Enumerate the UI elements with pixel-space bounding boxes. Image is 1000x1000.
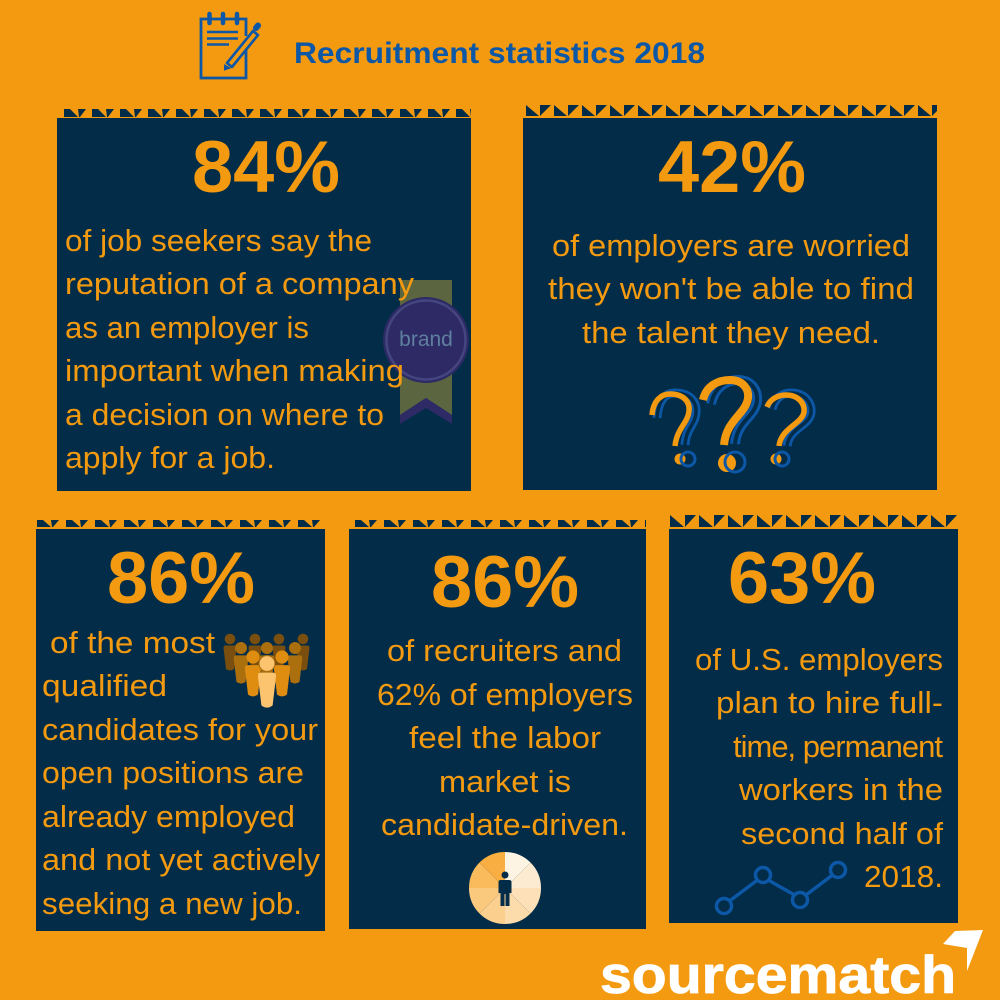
header icon: notepad and pencil: [201, 14, 258, 78]
body text: job seekers: reputation of a company: [65, 266, 415, 301]
body text: job seekers: as an employer is: [65, 310, 309, 345]
body text: qualified candidates: and not yet actively: [42, 842, 321, 877]
body text: recruiters: 62% of employers: [377, 677, 633, 712]
icon: group of people: [224, 634, 310, 708]
body text: worried employers: [548, 228, 914, 350]
icon: line chart: [716, 862, 846, 914]
logo: sourcematch: [600, 930, 983, 1000]
statistic: 84%: 84%: [192, 127, 340, 208]
body text: U.S. employers: [695, 642, 943, 894]
body text: qualified candidates: of the most: [50, 625, 215, 660]
statistic: 42%: 42%: [658, 127, 806, 208]
body text: qualified candidates: [42, 625, 321, 921]
body text: job seekers: [65, 223, 415, 475]
body text: job seekers: important when making: [65, 353, 404, 388]
body text: U.S. employers: workers in the: [738, 772, 943, 807]
body text: qualified candidates: open positions are: [42, 755, 304, 790]
icon: question marks: [652, 380, 811, 472]
body text: U.S. employers: plan to hire full-: [716, 685, 943, 720]
body text: recruiters: feel the labor: [409, 720, 601, 755]
body text: qualified candidates: already employed: [42, 799, 295, 834]
body text: U.S. employers: of U.S. employers: [695, 642, 943, 677]
body text: qualified candidates: qualified: [42, 668, 167, 703]
body text: qualified candidates: candidates for your: [42, 712, 318, 747]
body text: worried employers: of employers are worried: [552, 228, 910, 263]
body text: worried employers: they won't be able to find: [548, 271, 914, 306]
body text: recruiters: [377, 633, 633, 842]
body text: job seekers: of job seekers say the: [65, 223, 372, 258]
statistic: 86%: 86%: [107, 538, 255, 619]
icon: brand ribbon badge: brand: [399, 328, 453, 351]
panel: 63% U.S. employers: [669, 515, 958, 923]
body text: recruiters: candidate-driven.: [381, 807, 628, 842]
icon: logo arrow: [943, 930, 983, 971]
panel: 84% job seekers: [57, 109, 471, 491]
statistic: 86%: 86%: [431, 542, 579, 623]
body text: job seekers: a decision on where to: [65, 397, 384, 432]
body text: U.S. employers: time, permanent: [733, 729, 943, 764]
panel: 42% employers: [523, 105, 937, 490]
body text: recruiters: market is: [439, 764, 571, 799]
body text: qualified candidates: seeking a new job.: [42, 886, 302, 921]
title: Recruitment statistics 2018: [294, 37, 705, 70]
panel: 86% recruiters: [349, 520, 646, 929]
statistic: 63%: 63%: [728, 538, 876, 619]
panel: 86% qualified candidates: [36, 520, 325, 931]
body text: U.S. employers: 2018.: [864, 859, 943, 894]
body text: U.S. employers: second half of: [741, 816, 943, 851]
icon: brand ribbon badge: [383, 280, 469, 424]
body text: job seekers: apply for a job.: [65, 440, 275, 475]
body text: worried employers: the talent they need.: [582, 315, 880, 350]
icon: person in segmented circle: [469, 852, 541, 924]
body text: recruiters: of recruiters and: [387, 633, 622, 668]
